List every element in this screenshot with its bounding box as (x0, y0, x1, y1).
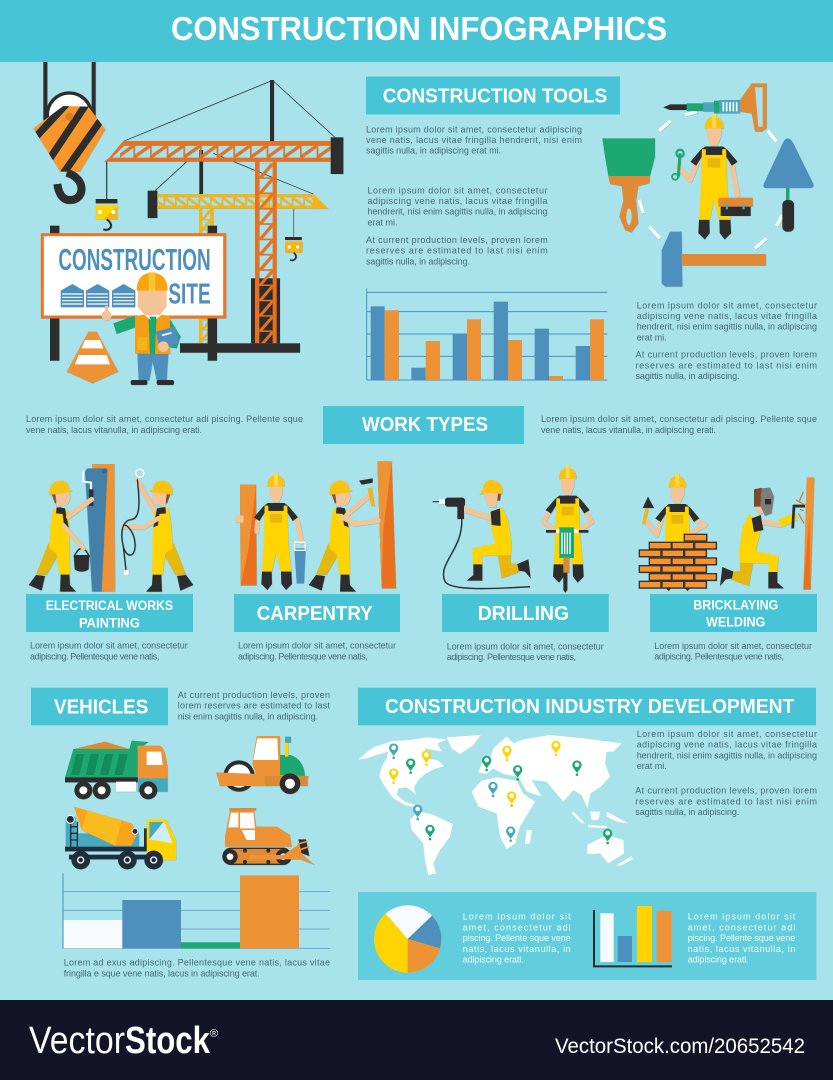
text block: pie note (463, 912, 571, 964)
workers: electrical and painting (29, 464, 193, 592)
text block: development (637, 729, 817, 771)
heading: work types: WORK TYPES (362, 413, 488, 436)
text block: bricklaying: adipiscing. Pellentesque vene natis, (654, 652, 784, 662)
text block: electrical (30, 641, 188, 661)
text block: tools detail: adipiscing vene natis, lacus vitae fringilla (368, 196, 548, 206)
text block: production levels: At current production levels, proven lorem (366, 235, 548, 245)
text block: electrical: Lorem ipsum dolor sit amet, consectetur (30, 641, 188, 651)
text block: tools right: hendrerit, nisi enim sagittis nulla, in adipiscing (637, 322, 817, 332)
text block: drilling (447, 642, 604, 662)
footer watermark band: VectorStock.com/20652542 (555, 1035, 805, 1058)
text block: work types right: vene natis, lacus vitanulla, in adipiscing erati. (541, 425, 716, 435)
text block: bricklaying (654, 641, 812, 662)
label: bricklaying welding: BRICKLAYING (693, 597, 778, 612)
icon: road roller (216, 736, 308, 794)
text block: tools right: Lorem ipsum dolor sit amet, consectetur (637, 300, 817, 310)
text block: drilling: Lorem ipsum dolor sit amet, consectetur (447, 642, 604, 652)
text block: tools right: erat mi. (637, 332, 667, 342)
text block: vehicles (178, 690, 330, 721)
footer watermark band: ® (210, 1028, 218, 1040)
text block: pie note: piscing. Pellente sque vene (463, 933, 571, 943)
text block: bricklaying: Lorem ipsum dolor sit amet, consectetur (654, 641, 812, 651)
text block: work types left (26, 414, 303, 435)
text block: electrical: adipiscing. Pellentesque vene natis, (30, 651, 159, 661)
text block: production levels (366, 235, 548, 266)
title banner: CONSTRUCTION INFOGRAPHICS (171, 10, 667, 47)
illustration: construction site (30, 62, 343, 385)
title banner (0, 0, 833, 62)
text block: pie note: amet, consectetur adi (463, 922, 571, 932)
text block: development production: At current production levels, proven lorem (635, 786, 817, 796)
text block: work types right (541, 414, 817, 435)
heading: vehicles: VEHICLES (54, 695, 148, 718)
text block: carpentry: Lorem ipsum dolor sit amet, consectetur (238, 641, 396, 651)
bar chart: tools (367, 288, 607, 380)
text block: development: adipiscing vene natis, lacus vitae fringilla (637, 740, 817, 750)
text block: bar note: adipiscing erati. (688, 954, 749, 964)
world map with pins (358, 735, 633, 875)
icon: traffic cone (67, 332, 118, 383)
label: bricklaying welding: WELDING (706, 615, 765, 630)
text block: development: erat mi. (637, 761, 667, 771)
worker with wrench and toolbox (672, 114, 753, 240)
text block: vehicles: lorem reserves are estimated to last (178, 701, 330, 711)
text block: tools detail: erat mi. (368, 217, 398, 227)
text block: work types right: Lorem ipsum dolor sit amet, consectetur adi piscing. Pellente sque (541, 414, 817, 424)
pie chart (374, 905, 441, 973)
text block: vehicles chart note (64, 958, 330, 978)
sign: construction site: SITE (168, 278, 211, 310)
heading: vehicles (31, 688, 168, 725)
workers: drilling (433, 465, 592, 593)
sign: construction site (42, 226, 225, 361)
workers: carpentry (235, 461, 396, 592)
label: electrical works painting: ELECTRICAL WORKS (46, 598, 173, 613)
brick wall (639, 534, 716, 588)
icon: crane hook (30, 62, 105, 200)
icon: bulldozer (222, 808, 315, 865)
text block: pie note: adipiscing erati. (463, 954, 524, 964)
heading: construction industry development (358, 688, 816, 725)
text block: tools right production: reserves are estimated to last nisi enim (636, 360, 817, 370)
icon: dump truck (65, 741, 168, 799)
text block: vehicles chart note: Lorem ad exus adipiscing. Pellentesque vene natis, lacus vitae (64, 958, 330, 968)
text block: tools right production: sagittis nulla, in adipiscing. (636, 371, 740, 381)
text block: tools intro: vene natis, lacus vitae fringilla hendrerit, nisi enim (366, 135, 582, 145)
heading: construction tools (366, 76, 620, 114)
text block: tools right production (636, 350, 817, 381)
heading: construction tools: CONSTRUCTION TOOLS (383, 85, 607, 108)
text block: development: hendrerit, nisi enim sagittis nulla, in adipiscing (637, 750, 817, 760)
text block: bar note: Lorem ipsum dolor sit (688, 912, 796, 922)
footer watermark band: Vector (29, 1020, 125, 1062)
text block: development production: sagittis nulla, in adipiscing. (635, 807, 739, 817)
text block: bar note: piscing. Pellente sque vene (688, 933, 795, 943)
text block: tools right: adipiscing vene natis, lacus vitae fringilla (637, 311, 817, 321)
text block: pie note: Lorem ipsum dolor sit (463, 912, 571, 922)
text block: pie note: natis, lacus vitanulla, in (463, 944, 571, 954)
text block: bar note: amet, consectetur adi (688, 922, 795, 932)
icon: hammer (662, 232, 766, 287)
text block: vehicles chart note: fringilla e sque vene natis, lacus in adipiscing erat. (64, 968, 260, 978)
map pins (389, 741, 612, 844)
text block: tools detail (368, 185, 548, 227)
text block: carpentry (238, 641, 396, 661)
label: electrical works painting (26, 594, 193, 632)
label: carpentry: CARPENTRY (257, 602, 373, 625)
heading: construction industry development: CONSTRUCTION INDUSTRY DEVELOPMENT (385, 695, 795, 718)
text block: carpentry: adipiscing. Pellentesque vene natis, (238, 651, 368, 661)
label: carpentry (234, 594, 400, 632)
text block: development: Lorem ipsum dolor sit amet, consectetur (637, 729, 817, 739)
text block: tools right production: At current production levels, proven lorem (636, 350, 817, 360)
text block: tools detail: hendrerit, nisi enim sagittis nulla, in adipiscing (368, 207, 548, 217)
text block: tools intro: sagittis nulla, in adipiscing erat mi. (366, 146, 501, 156)
text block: tools right (637, 300, 817, 342)
panel: charts (358, 892, 816, 980)
text block: development production: reserves are estimated to last nisi enim (635, 796, 817, 806)
text block: bar note: natis, lacus vitanulla, in (688, 944, 795, 954)
text block: development production (635, 786, 817, 817)
text block: production levels: sagittis nulla, in adipiscing. (366, 256, 470, 266)
label: bricklaying welding (650, 594, 817, 632)
text block: tools intro (366, 124, 582, 156)
site manager figure (102, 272, 181, 385)
icon: trowel (763, 138, 813, 232)
vehicles group (65, 736, 315, 869)
icon: concrete mixer (65, 807, 176, 869)
text block: vehicles: nisi enim sagittis nulla, in adipiscing. (178, 711, 318, 721)
text block: tools detail: Lorem ipsum dolor sit amet, consectetur (368, 185, 548, 195)
heading: work types (323, 406, 524, 444)
text block: production levels: reserves are estimated to last nisi enim (366, 246, 548, 256)
text block: work types left: vene natis, lacus vitanulla, in adipiscing erati. (26, 425, 202, 435)
map: continents (358, 735, 633, 875)
sign: construction site: CONSTRUCTION (58, 243, 211, 277)
label: drilling: DRILLING (478, 602, 569, 625)
text block: tools intro: Lorem ipsum dolor sit amet, consectetur adipiscing (366, 124, 582, 134)
footer watermark band (0, 1000, 833, 1080)
mini bar chart (594, 906, 672, 966)
illustration: tools circle (602, 83, 813, 287)
icon: paint brush (602, 138, 655, 232)
label: drilling (442, 594, 609, 632)
text block: drilling: adipiscing. Pellentesque vene natis, (447, 652, 576, 662)
text block: bar note (688, 912, 796, 964)
text block: work types left: Lorem ipsum dolor sit amet, consectetur adi piscing. Pellente sque (26, 414, 303, 424)
workers: bricklaying and welding (639, 473, 814, 591)
text block: vehicles: At current production levels, proven (178, 690, 330, 700)
label: electrical works painting: PAINTING (79, 615, 140, 630)
icon: jackhammer (663, 83, 767, 132)
orange tower crane (96, 80, 343, 353)
footer watermark band: Stock (125, 1020, 211, 1062)
yellow crane (148, 150, 328, 343)
bar chart: vehicles (63, 873, 330, 948)
